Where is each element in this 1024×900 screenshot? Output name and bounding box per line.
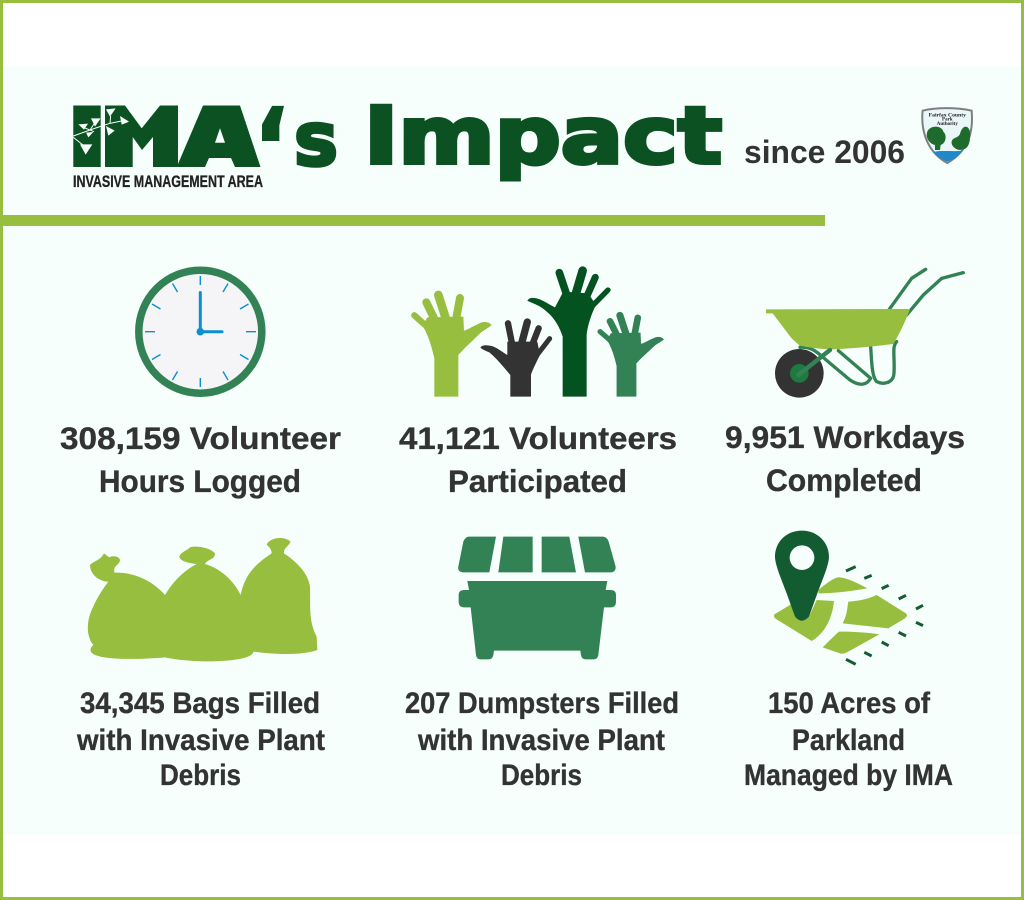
label: volunteer hours: 308,159 Volunteer <box>60 420 341 456</box>
since 2006: since 2006 <box>744 134 905 170</box>
header divider bar <box>0 215 825 226</box>
park authority badge: Park <box>942 118 953 123</box>
icon: raised hands <box>414 271 664 397</box>
label: volunteer hours: Hours Logged <box>99 463 301 499</box>
header <box>73 88 972 205</box>
title: apostrophe s: s <box>294 97 338 183</box>
stat: volunteer hours <box>60 270 341 499</box>
park authority badge <box>922 108 972 163</box>
stat: volunteers <box>399 271 677 499</box>
icon: clock <box>139 270 262 393</box>
label: bags: with Invasive Plant <box>76 724 325 757</box>
label: volunteers: Participated <box>448 463 627 499</box>
park authority badge: Authority <box>937 122 958 127</box>
label: bags: Debris <box>160 759 241 792</box>
stat: workdays <box>725 269 965 498</box>
logo leaves <box>73 108 129 155</box>
IMA logo <box>73 106 263 191</box>
label: dumpsters: with Invasive Plant <box>417 724 665 757</box>
title: apostrophe s <box>255 88 338 205</box>
logo subtitle: INVASIVE MANAGEMENT AREA <box>73 173 263 191</box>
icon: wheelbarrow <box>766 269 963 398</box>
label: workdays: Completed <box>766 462 922 498</box>
icon: dumpster <box>458 537 616 659</box>
label: acres: 150 Acres of <box>768 687 931 720</box>
stat: dumpsters <box>405 537 679 792</box>
title: Impact: Impact <box>364 92 722 182</box>
park authority badge: Fairfax County <box>929 113 966 119</box>
label: acres: Managed by IMA <box>744 759 953 792</box>
icon: map pin <box>774 531 923 664</box>
label: volunteers: 41,121 Volunteers <box>399 420 677 456</box>
label: acres: Parkland <box>792 724 905 757</box>
title: apostrophe s: ‘ <box>255 88 287 205</box>
icon: trash bags <box>88 538 317 661</box>
label: dumpsters: Debris <box>501 759 582 792</box>
stat: bags <box>76 538 325 792</box>
label: workdays: 9,951 Workdays <box>725 419 965 455</box>
label: dumpsters: 207 Dumpsters Filled <box>405 687 679 720</box>
stat: acres <box>744 531 953 792</box>
logo letters <box>73 106 260 167</box>
label: bags: 34,345 Bags Filled <box>80 687 320 720</box>
